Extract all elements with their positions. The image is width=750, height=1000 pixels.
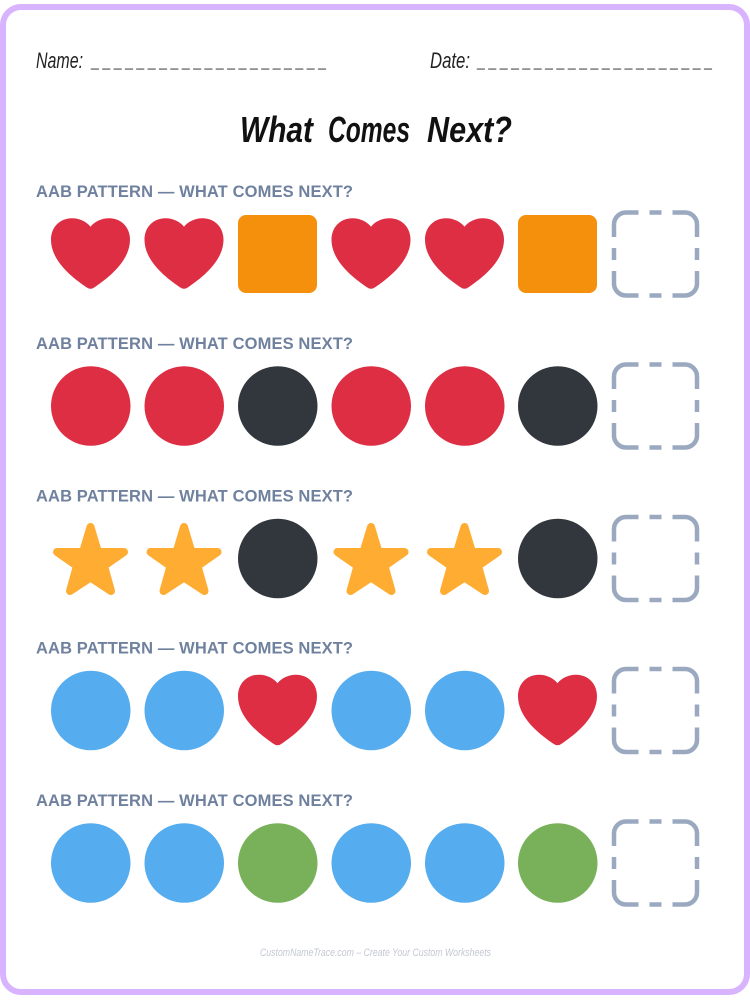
- row 4 empty answer box: [614, 669, 697, 752]
- title: What: [240, 109, 315, 150]
- row 4 label: AAB PATTERN — WHAT COMES NEXT?: [36, 640, 353, 658]
- row 5 shape sequence: [51, 823, 598, 903]
- date field: [430, 48, 715, 73]
- row 4: blue circles and hearts: [36, 640, 697, 752]
- title: Next?: [427, 109, 512, 150]
- row 3 shape sequence: [57, 519, 598, 598]
- row 2 empty answer box: [614, 364, 697, 448]
- name field: Name:: [36, 48, 83, 73]
- row 3 label: AAB PATTERN — WHAT COMES NEXT?: [36, 488, 353, 506]
- row 2 shape sequence: [51, 366, 598, 446]
- row 5: blue and green circles: [36, 792, 697, 904]
- name field: [36, 48, 329, 73]
- date field: Date:: [430, 48, 470, 73]
- row 3: stars and dark circles: [36, 488, 697, 600]
- row 3 empty answer box: [614, 517, 697, 600]
- row 5 empty answer box: [614, 822, 697, 904]
- row 4 shape sequence: [51, 671, 597, 750]
- name field: _____________________: [90, 54, 329, 70]
- row 1 shape sequence: [51, 215, 597, 293]
- row 5 label: AAB PATTERN — WHAT COMES NEXT?: [36, 792, 353, 810]
- title: [240, 109, 512, 150]
- row 1: hearts and squares: [36, 183, 697, 296]
- title: Comes: [328, 109, 410, 150]
- row 2 label: AAB PATTERN — WHAT COMES NEXT?: [36, 335, 353, 353]
- row 1 label: AAB PATTERN — WHAT COMES NEXT?: [36, 183, 353, 201]
- row 1 empty answer box: [614, 212, 697, 296]
- footer credit: CustomNameTrace.com – Create Your Custom Worksheets: [260, 947, 491, 959]
- date field: _____________________: [476, 54, 715, 70]
- row 2: red and dark circles: [36, 335, 697, 448]
